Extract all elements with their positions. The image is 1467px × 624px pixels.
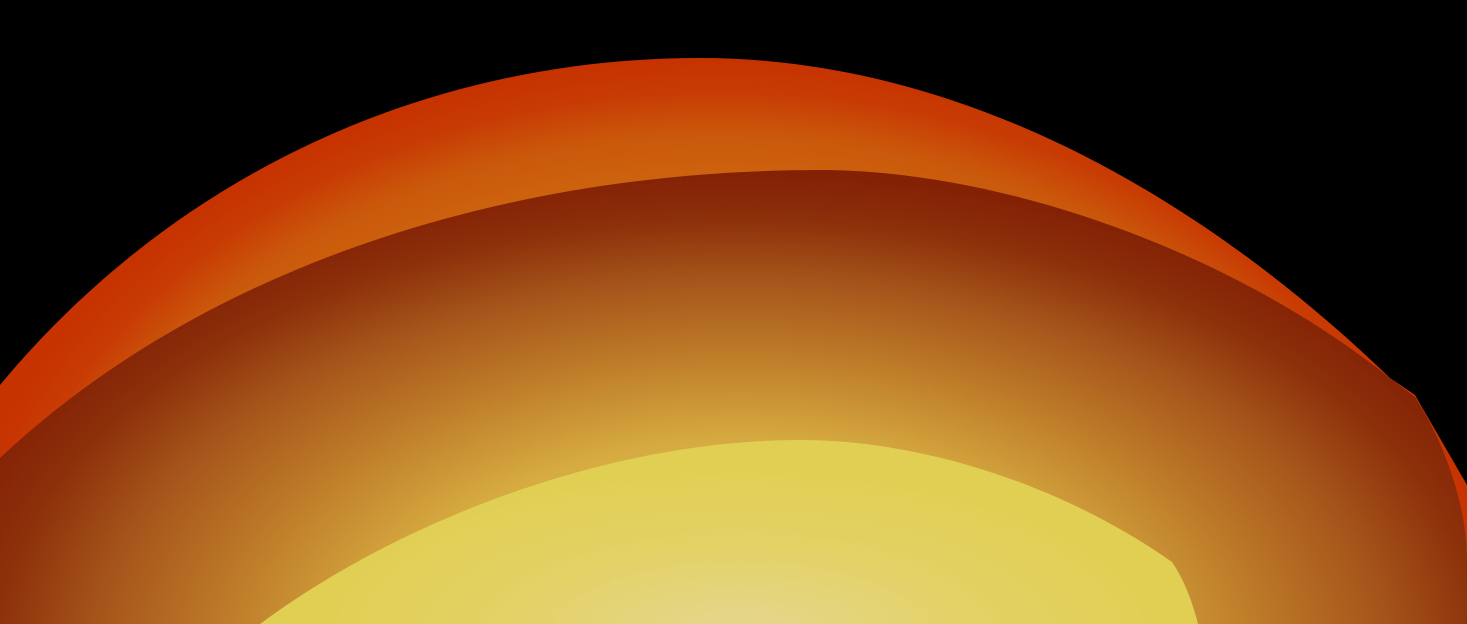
inner yellow core [260, 440, 1198, 624]
middle amber layer [0, 170, 1467, 624]
